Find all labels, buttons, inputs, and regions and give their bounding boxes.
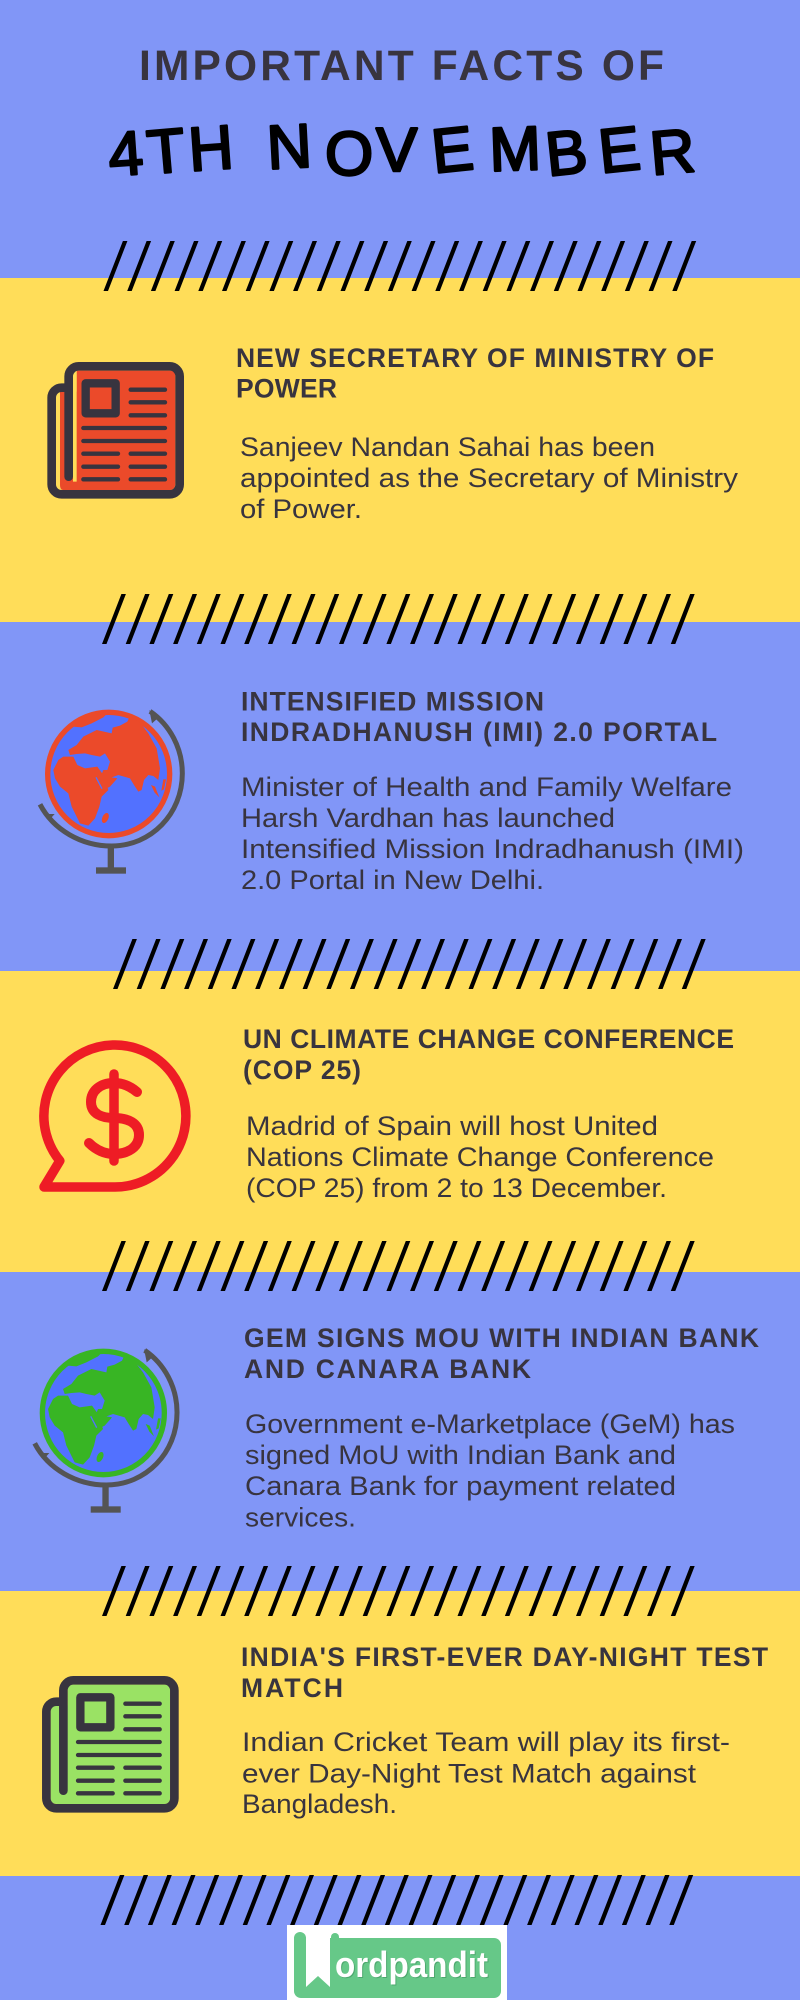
panel: gem signs mou	[0, 1272, 800, 1591]
background: header band	[0, 0, 800, 278]
body text: Intensified Mission Indradhanush (IMI)	[241, 834, 744, 864]
stripe divider 5	[102, 1566, 695, 1616]
icon: dollar speech bubble	[44, 1045, 186, 1187]
body text	[246, 1111, 714, 1203]
panel background	[0, 1272, 800, 1591]
stripe divider 1	[104, 241, 696, 291]
heading: date: 4TH NOVEMBER	[106, 112, 698, 190]
stripe divider 3	[113, 939, 706, 989]
body text: services.	[245, 1502, 356, 1532]
panel: india's first-ever day-night test match	[0, 1591, 800, 1876]
body text: 2.0 Portal in New Delhi.	[241, 865, 544, 895]
body text	[242, 1727, 730, 1819]
icon: red globe	[40, 710, 182, 874]
body text: signed MoU with Indian Bank and	[245, 1440, 676, 1470]
heading line 2: AND CANARA BANK	[244, 1354, 531, 1384]
heading: NEW SECRETARY OF MINISTRY OF	[236, 343, 714, 373]
heading line 2: INDRADHANUSH (IMI) 2.0 PORTAL	[241, 717, 717, 747]
stripe divider 6	[100, 1875, 693, 1925]
heading: UN CLIMATE CHANGE CONFERENCE	[243, 1024, 734, 1054]
body text: Minister of Health and Family Welfare	[241, 772, 732, 802]
icon: red newspaper	[52, 366, 180, 494]
heading: INDIA'S FIRST-EVER DAY-NIGHT TEST	[241, 1642, 768, 1672]
body text: Sanjeev Nandan Sahai has been	[240, 432, 655, 462]
heading: INTENSIFIED MISSION	[241, 686, 544, 716]
body text: Indian Cricket Team will play its first-	[242, 1727, 730, 1757]
body text	[245, 1409, 735, 1532]
body text: (COP 25) from 2 to 13 December.	[246, 1173, 667, 1203]
stripe divider 4	[102, 1241, 695, 1291]
body text: Government e-Marketplace (GeM) has	[245, 1409, 735, 1439]
body text: Bangladesh.	[242, 1789, 397, 1819]
body text: ever Day-Night Test Match against	[242, 1758, 697, 1788]
icon: green newspaper	[46, 1680, 174, 1808]
panel background	[0, 971, 800, 1272]
panel background	[0, 278, 800, 622]
footer band	[0, 1876, 800, 2000]
title block	[106, 43, 698, 190]
logo: wordpandit	[287, 1925, 507, 2000]
heading line 2: (COP 25)	[243, 1055, 361, 1085]
logo: wordpandit: ordpandit	[335, 1944, 488, 1985]
body text: Nations Climate Change Conference	[246, 1142, 714, 1172]
body text: appointed as the Secretary of Ministry	[240, 463, 739, 493]
body text: Harsh Vardhan has launched	[241, 803, 615, 833]
heading: GEM SIGNS MOU WITH INDIAN BANK	[244, 1323, 759, 1353]
heading: important facts of: IMPORTANT FACTS OF	[139, 43, 664, 90]
panel: intensified mission indradhanush	[0, 622, 800, 971]
body text: Canara Bank for payment related	[245, 1471, 676, 1501]
body text: Madrid of Spain will host United	[246, 1111, 658, 1141]
body text	[240, 432, 739, 524]
panel: new secretary of ministry of power	[0, 278, 800, 622]
panel background	[0, 622, 800, 971]
stripe divider 2	[102, 594, 695, 644]
body text: of Power.	[240, 494, 362, 524]
heading line 2: MATCH	[241, 1673, 343, 1703]
panel: un climate change conference	[0, 971, 800, 1272]
panel background	[0, 1591, 800, 1876]
logo: wordpandit: ordpandit	[336, 1945, 489, 1986]
body text	[241, 772, 744, 895]
icon: green globe	[35, 1349, 177, 1513]
heading line 2: POWER	[236, 374, 337, 404]
